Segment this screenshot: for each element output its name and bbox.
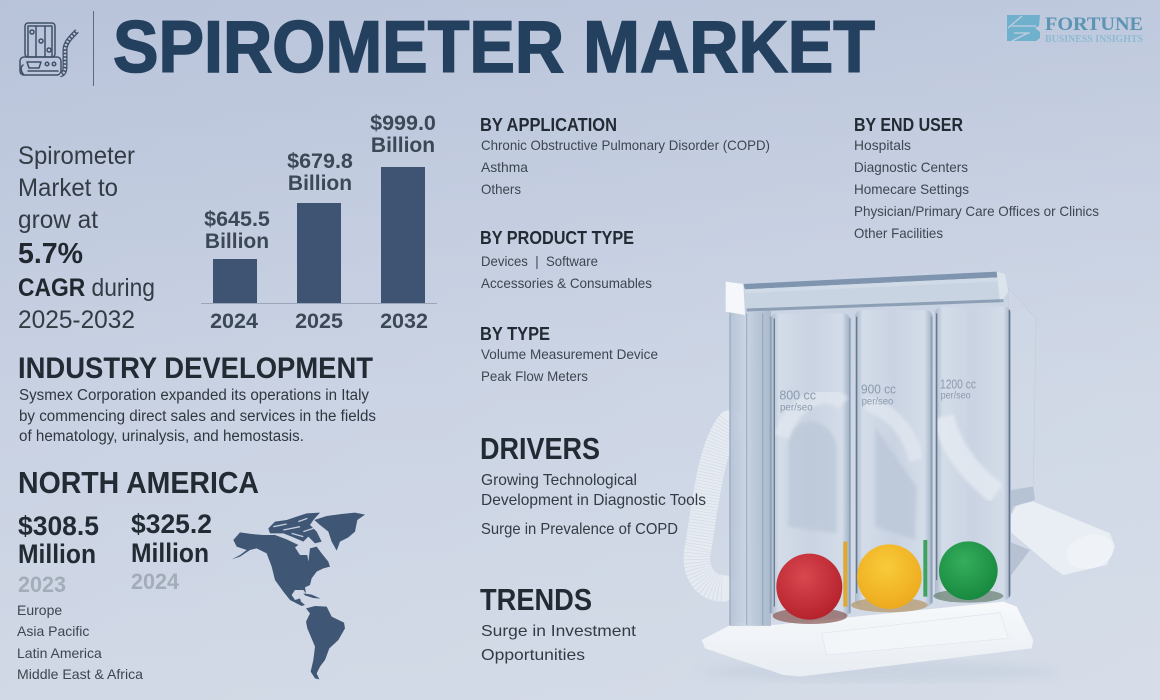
tube 1: 800 cc xyxy=(779,387,816,402)
bar 2024: Billion xyxy=(205,230,269,253)
South America xyxy=(306,606,345,679)
stat: 2024 xyxy=(131,509,212,594)
segment: by application: Chronic Obstructive Pulmonary Disorder (COPD) xyxy=(481,137,770,153)
shadow xyxy=(700,662,1060,682)
text: drivers: Development in Diagnostic Tools xyxy=(481,492,706,509)
segment: by product type: Devices | Software xyxy=(481,253,598,269)
title: SPIROMETER MARKET xyxy=(113,7,875,88)
heading: drivers: DRIVERS xyxy=(480,431,600,466)
Arctic islands xyxy=(268,513,322,543)
stat: 2023 xyxy=(18,511,99,597)
segment: by end user xyxy=(854,115,1099,241)
left hose xyxy=(697,423,730,588)
CAGR text block: 5.7% xyxy=(18,238,83,270)
segment: by application: Others xyxy=(481,181,521,197)
red ball xyxy=(776,554,842,620)
CAGR text block: 2025-2032 xyxy=(18,306,135,334)
bar 2025: $679.8 xyxy=(287,149,353,173)
segment: by type: BY TYPE xyxy=(480,324,550,344)
white end cap xyxy=(726,282,745,315)
tube 2: 900 cc xyxy=(861,381,896,396)
bar 2024 xyxy=(204,207,270,333)
tube 1: per/seo xyxy=(780,403,813,414)
text: industry development: of hematology, urinalysis, and hemostasis. xyxy=(19,428,304,445)
CAGR text block: Spirometer xyxy=(18,142,135,170)
bar 2032: Billion xyxy=(371,134,435,157)
segment: by end user: Diagnostic Centers xyxy=(854,159,968,175)
mouthpiece xyxy=(995,487,1117,575)
segment: by product type: BY PRODUCT TYPE xyxy=(480,228,634,248)
logo mark xyxy=(1007,15,1040,41)
region list xyxy=(17,602,143,682)
dark tube edges xyxy=(774,310,1009,607)
text: trends xyxy=(481,623,637,664)
CAGR text block: Market to xyxy=(18,174,118,202)
segment: by product type: Accessories & Consumables xyxy=(481,275,652,291)
bar 2025: 2025 xyxy=(295,309,343,333)
bar 2025: Billion xyxy=(288,172,352,195)
segment: by application: Asthma xyxy=(481,159,528,175)
Greenland xyxy=(314,513,365,551)
divider xyxy=(92,11,94,86)
CAGR text block xyxy=(18,142,155,334)
top bar xyxy=(743,272,1008,312)
bar 2025 xyxy=(287,149,353,333)
logo name xyxy=(1045,14,1143,45)
right back panel xyxy=(1008,288,1036,490)
tube 1 xyxy=(771,313,850,617)
text: drivers: Surge in Prevalence of COPD xyxy=(481,521,678,538)
stat: 2023: $308.5 xyxy=(18,511,99,541)
logo name: FORTUNE xyxy=(1045,14,1143,35)
text: trends: Surge in Investment xyxy=(481,623,637,640)
heading: industry development: INDUSTRY DEVELOPMENT xyxy=(18,352,373,385)
text: drivers xyxy=(481,472,706,538)
bar 2032: 2032 xyxy=(380,309,428,333)
CAGR text block: grow at xyxy=(18,206,98,234)
region list: Europe xyxy=(17,602,62,618)
segment: by end user: BY END USER xyxy=(854,115,963,135)
logo: Fortune Business Insights xyxy=(1007,14,1143,45)
text: industry development: by commencing direct sales and services in the fields xyxy=(19,408,376,425)
logo name: BUSINESS INSIGHTS xyxy=(1045,34,1143,45)
tube 3 xyxy=(935,307,1011,600)
text: industry development xyxy=(19,387,376,445)
North America xyxy=(232,532,330,606)
colour reflections xyxy=(843,542,847,607)
yellow ball xyxy=(857,544,922,609)
text: drivers: Growing Technological xyxy=(481,472,637,489)
base xyxy=(702,602,1033,677)
ball seats xyxy=(773,608,847,624)
left frame xyxy=(729,310,771,626)
tube 3: 1200 cc xyxy=(940,376,976,391)
bar chart xyxy=(201,111,437,333)
segment: by product type xyxy=(480,228,652,291)
heading: north america: NORTH AMERICA xyxy=(18,465,259,500)
bar 2024: 2024 xyxy=(210,309,258,333)
bar 2032 xyxy=(370,111,436,333)
region list: Asia Pacific xyxy=(17,623,89,639)
CAGR text block: CAGR during xyxy=(18,274,155,302)
map: Americas xyxy=(232,513,365,679)
stat: 2024: 2024 xyxy=(131,569,180,594)
segment: by end user: Other Facilities xyxy=(854,225,943,241)
tube 2: per/seo xyxy=(862,397,894,408)
region list: Latin America xyxy=(17,645,102,661)
segment: by type xyxy=(480,324,658,384)
bar 2024: $645.5 xyxy=(204,207,270,231)
segment: by type: Volume Measurement Device xyxy=(481,346,658,362)
segment: by type: Peak Flow Meters xyxy=(481,368,588,384)
tube 2 xyxy=(855,310,932,607)
stat: 2024: Million xyxy=(131,538,209,568)
region list: Middle East & Africa xyxy=(17,666,143,682)
text: trends: Opportunities xyxy=(481,647,585,664)
Caribbean xyxy=(303,593,321,599)
segment: by end user: Hospitals xyxy=(854,137,911,153)
tube 3: per/seo xyxy=(941,391,971,402)
heading: trends: TRENDS xyxy=(480,582,592,617)
product photo: spirometer xyxy=(697,272,1117,682)
green ball xyxy=(939,541,998,600)
segment: by end user: Physician/Primary Care Offices or Clinics xyxy=(854,203,1099,219)
text: industry development: Sysmex Corporation expanded its operations in Italy xyxy=(19,387,369,404)
segment: by application: BY APPLICATION xyxy=(480,115,617,135)
segment: by end user: Homecare Settings xyxy=(854,181,969,197)
segment: by application xyxy=(480,115,770,197)
stat: 2023: 2023 xyxy=(18,572,66,597)
bar 2032: $999.0 xyxy=(370,111,436,135)
stat: 2024: $325.2 xyxy=(131,509,212,539)
stat: 2023: Million xyxy=(18,539,96,569)
icon: spirometer xyxy=(20,23,77,75)
